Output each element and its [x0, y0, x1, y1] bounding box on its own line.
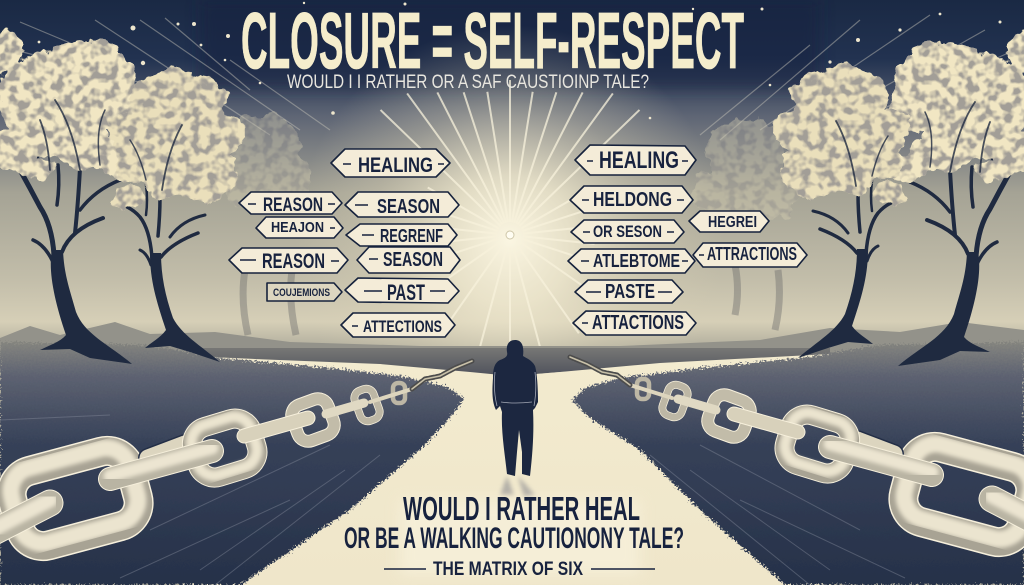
chain ring 1 [5, 443, 144, 551]
sign: season [345, 192, 459, 218]
left chain [0, 361, 472, 551]
sign: healing [331, 149, 450, 177]
subtitle: WOULD I I RATHER OR A SAF CAUSTIOINP TALE? [287, 72, 649, 93]
sign: past: PAST [387, 280, 425, 305]
sign: hegret [689, 211, 769, 232]
sign: reason: REASON [263, 195, 323, 216]
sign: conjections: COUJEMIONS [273, 287, 330, 299]
sign: healing [575, 145, 696, 175]
sign: heldong: HELDONG [593, 189, 672, 211]
sign: attractions [693, 243, 807, 267]
sign: past [345, 278, 459, 305]
sign: season 2: SEASON [383, 249, 443, 271]
matrix of six caption: THE MATRIX OF SIX [433, 559, 583, 580]
sign: or seson [571, 220, 684, 243]
stars [38, 2, 1002, 119]
chain pill 2 [244, 418, 308, 436]
right ground [572, 342, 1024, 585]
chain pill 3 [326, 403, 364, 414]
sign: reason [239, 192, 342, 216]
bottom question line 1: WOULD I RATHER HEAL [403, 490, 640, 527]
left signs [229, 149, 460, 337]
person shadow [500, 476, 535, 497]
sign: season: SEASON [377, 196, 440, 218]
sunburst rays [381, 80, 639, 365]
right signs [568, 145, 807, 335]
sign: attactions: ATTACTIONS [592, 312, 684, 334]
person highlight [494, 372, 536, 406]
sign: regrent [346, 224, 457, 246]
sign: healing: HEALING [599, 147, 679, 174]
sign: healing: HEALING [358, 154, 433, 177]
sign: attactions [573, 311, 696, 335]
chain connector 1 [148, 444, 185, 458]
sign: attections [341, 313, 455, 337]
sign: season 2 [357, 247, 460, 273]
sign: conjections [267, 283, 342, 301]
chain ring 2 [187, 412, 262, 482]
faint background tree right [693, 117, 796, 330]
sign: attractions: ATTRACTIONS [707, 244, 797, 264]
sign: paste: PASTE [605, 281, 655, 303]
sign: attections: ATTECTIONS [363, 317, 442, 336]
chain tail [370, 361, 472, 402]
sign: heajon [256, 217, 343, 238]
chain ring 4 [352, 387, 382, 423]
sign: or seson: OR SESON [593, 222, 662, 241]
sign: atleetome [568, 249, 695, 273]
tree 1 left [0, 31, 142, 364]
sign: reason 2 [229, 248, 348, 273]
sign: heajon: HEAJON [271, 219, 324, 236]
sign: paste [575, 280, 683, 303]
sign: hegret: HEGREI [708, 214, 757, 231]
chain ring 5 [393, 383, 405, 403]
faint background tree left [221, 114, 315, 335]
sign: heldong [570, 186, 693, 213]
tree 1 right [888, 33, 1024, 366]
sign: reason 2: REASON [262, 250, 325, 273]
chain pill 1 [110, 448, 212, 479]
person walking away [492, 340, 538, 476]
right chain [570, 357, 1024, 547]
tree 2 right [776, 66, 911, 358]
bottom question line 2: OR BE A WALKING CAUTIONONY TALE? [344, 522, 684, 555]
horizon band [200, 348, 830, 376]
road [180, 354, 830, 585]
sun centre [506, 231, 514, 239]
tree 2 left [107, 70, 242, 362]
sign: atleetome: ATLEBTOME [593, 251, 680, 271]
sign: regrent: REGRENF [380, 226, 443, 246]
distant mountains [0, 322, 1024, 372]
chain ring 3 [289, 396, 337, 444]
ground streaks [0, 415, 905, 585]
sky streaks [15, 15, 1015, 140]
bottom text glow [400, 500, 640, 575]
left ground [0, 342, 464, 585]
chain pill 0 [0, 500, 50, 534]
